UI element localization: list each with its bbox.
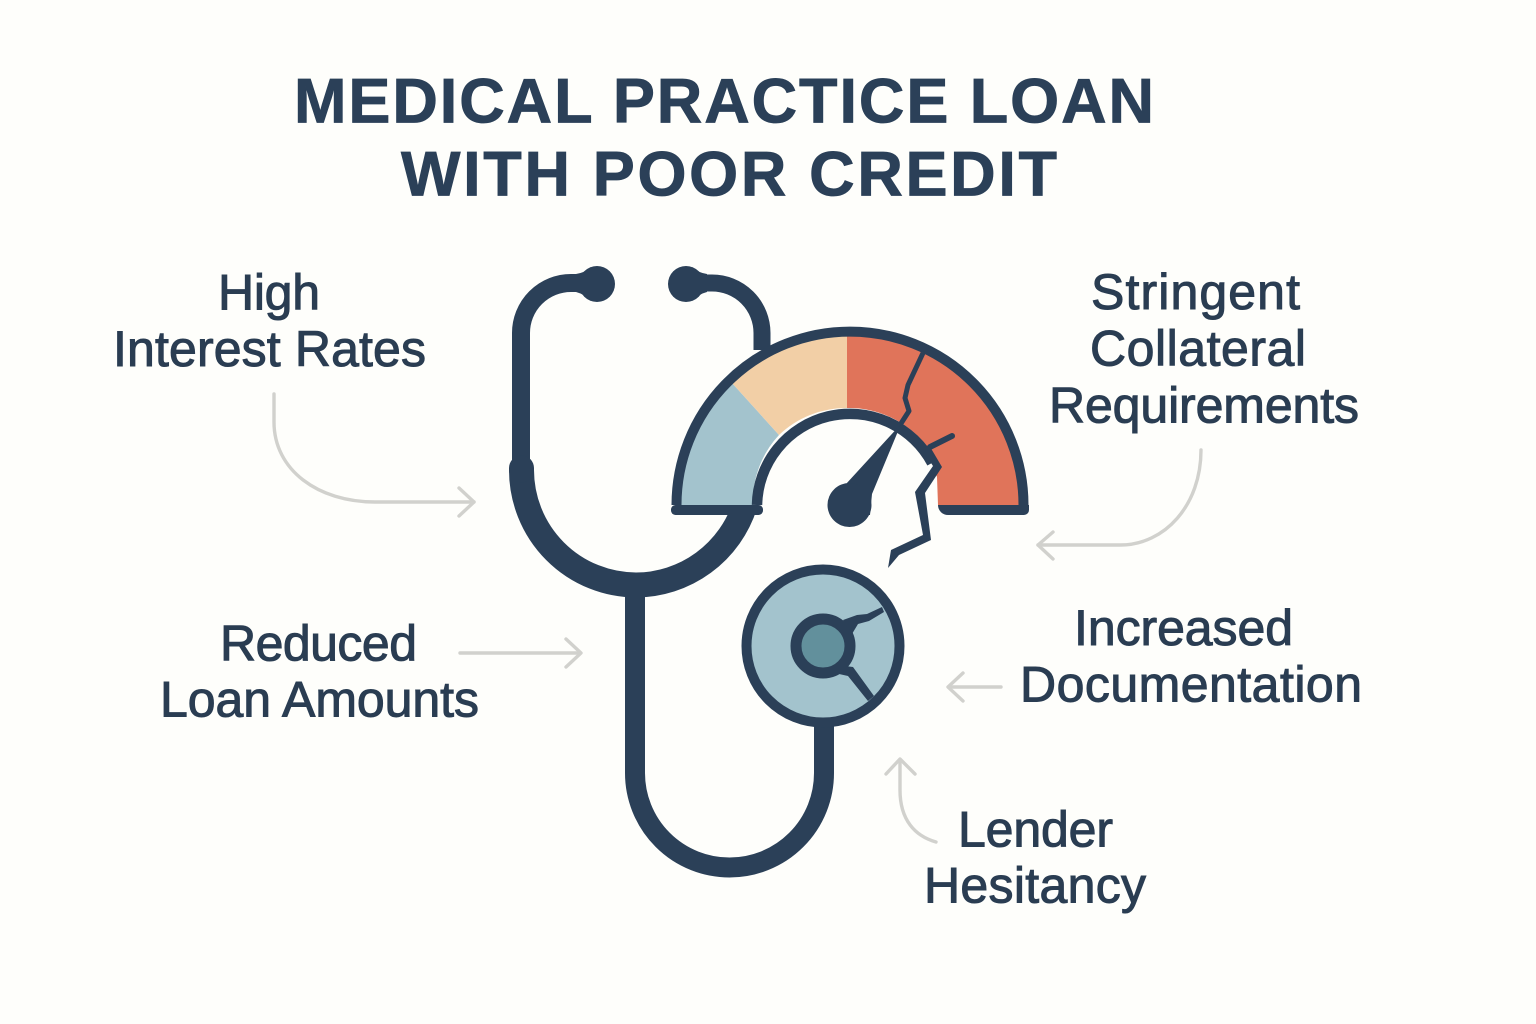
arrow: Reduced Loan Amounts bbox=[460, 639, 581, 667]
label: Lender Hesitancy bbox=[924, 802, 1146, 914]
icon: stethoscope tubing bbox=[521, 266, 824, 867]
label: Stringent Collateral Requirements bbox=[1049, 264, 1359, 434]
label: Stringent Collateral Requirements: Collateral bbox=[1090, 320, 1306, 376]
gauge outer outline bbox=[676, 332, 1024, 505]
icon: credit score gauge bbox=[671, 332, 1029, 568]
label: High Interest Rates: High bbox=[218, 264, 320, 320]
label: Reduced Loan Amounts: Reduced bbox=[220, 616, 417, 672]
icon: stethoscope chest piece bbox=[746, 570, 900, 722]
title: WITH POOR CREDIT bbox=[401, 140, 1057, 210]
label: Increased Documentation bbox=[1020, 600, 1362, 712]
label: Reduced Loan Amounts: Loan Amounts bbox=[160, 672, 479, 728]
gauge blue segment bbox=[681, 383, 779, 505]
gauge left base bbox=[671, 505, 763, 515]
chest piece upper crack bbox=[843, 607, 884, 634]
label: Lender Hesitancy: Hesitancy bbox=[924, 858, 1146, 914]
label: Reduced Loan Amounts bbox=[160, 616, 479, 728]
crack through gauge bbox=[900, 353, 923, 425]
label: Increased Documentation: Documentation bbox=[1020, 656, 1362, 712]
needle hub bbox=[828, 483, 872, 527]
label: Stringent Collateral Requirements: Stringent bbox=[1091, 264, 1300, 320]
gauge tick bbox=[930, 436, 952, 447]
label: High Interest Rates bbox=[113, 264, 426, 377]
chest piece lower crack bbox=[839, 666, 874, 701]
arrow: Lender Hesitancy bbox=[886, 759, 936, 842]
crack below gauge bbox=[888, 445, 942, 568]
arrow: Stringent Collateral Requirements bbox=[1038, 450, 1201, 559]
gauge right base bbox=[938, 505, 1029, 515]
gauge tan segment bbox=[732, 336, 847, 435]
title bbox=[294, 66, 1154, 210]
label: Lender Hesitancy: Lender bbox=[958, 802, 1113, 858]
label: Stringent Collateral Requirements: Requirements bbox=[1049, 378, 1359, 434]
title: MEDICAL PRACTICE LOAN bbox=[294, 66, 1154, 136]
label: High Interest Rates: Interest Rates bbox=[113, 321, 426, 377]
gauge red segment bbox=[847, 336, 1019, 505]
label: Increased Documentation: Increased bbox=[1074, 600, 1293, 656]
arrow: High Interest Rates bbox=[274, 394, 474, 516]
arrow: Increased Documentation bbox=[948, 673, 1001, 701]
gauge needle bbox=[828, 424, 901, 515]
gauge inner outline bbox=[757, 414, 932, 505]
